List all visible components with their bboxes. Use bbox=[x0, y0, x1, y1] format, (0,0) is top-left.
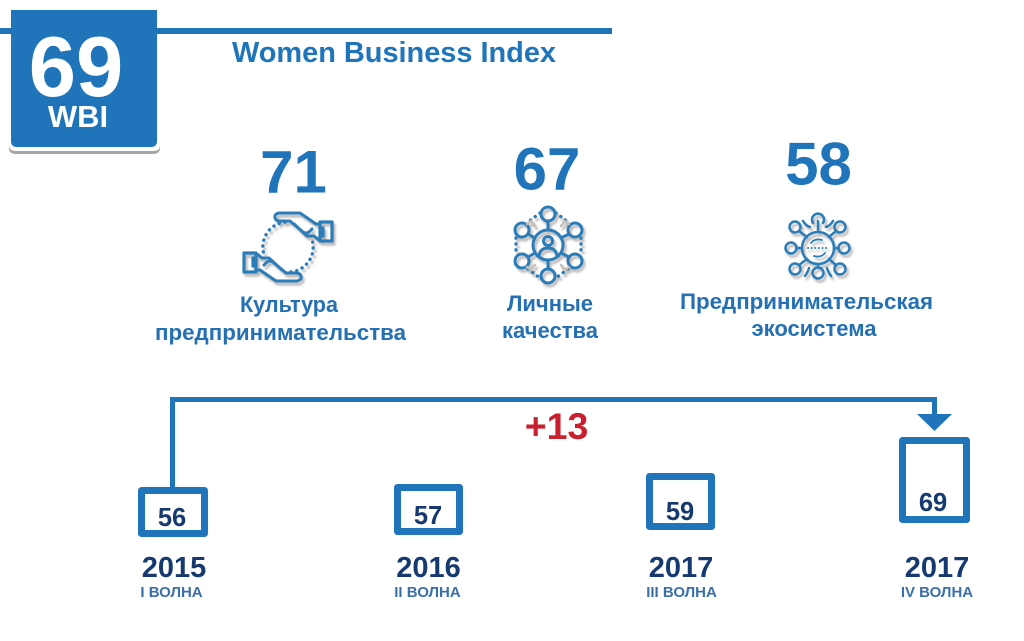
panel: culture of entrepreneurship: предпринимательства bbox=[155, 320, 407, 345]
column: 2017 fourth wave: 69 bbox=[919, 489, 947, 517]
column: 2017 third wave: 2017 bbox=[649, 552, 713, 584]
personal qualities score: 67 bbox=[514, 136, 580, 202]
ecosystem score: 58 bbox=[785, 130, 852, 198]
panel: culture of entrepreneurship bbox=[155, 138, 407, 345]
icon: ecosystem bbox=[786, 214, 850, 278]
culture label: Культура bbox=[240, 292, 339, 317]
WBI score badge: 69 bbox=[29, 20, 123, 115]
ecosystem label: Предпринимательская bbox=[680, 289, 933, 314]
column: 2015: 56 bbox=[158, 504, 186, 532]
column: 2016 bbox=[394, 488, 461, 601]
panel: personal qualities: качества bbox=[502, 318, 599, 343]
WBI score badge bbox=[9, 10, 160, 154]
column: 2016: II ВОЛНА bbox=[394, 584, 461, 601]
column: 2015: I ВОЛНА bbox=[140, 584, 203, 601]
column: 2016: 57 bbox=[414, 502, 442, 530]
growth value: +13 bbox=[525, 405, 588, 447]
column: 2017 fourth wave bbox=[901, 440, 973, 601]
WBI score badge: WBI bbox=[48, 99, 108, 134]
title: Women Business Index bbox=[232, 37, 556, 69]
column: 2015: 2015 bbox=[142, 552, 206, 584]
column: 2017 fourth wave: IV ВОЛНА bbox=[901, 584, 973, 601]
column: 2017 third wave: III ВОЛНА bbox=[646, 584, 717, 601]
column: 2017 third wave: 59 bbox=[666, 498, 694, 526]
column: 2015 bbox=[140, 490, 206, 601]
panel: entrepreneurial ecosystem: экосистема bbox=[752, 316, 877, 341]
header rule bbox=[0, 28, 612, 34]
icon: hands bbox=[244, 213, 332, 281]
column: 2016: 2016 bbox=[396, 552, 461, 584]
arrow: growth from first to fourth wave bbox=[172, 400, 952, 490]
icon: person network bbox=[515, 207, 582, 283]
panel: personal qualities bbox=[502, 136, 599, 343]
column: 2017 fourth wave: 2017 bbox=[905, 552, 969, 584]
panel: entrepreneurial ecosystem bbox=[680, 130, 933, 341]
column: 2017 third wave bbox=[646, 476, 717, 601]
culture score: 71 bbox=[260, 138, 327, 206]
personal qualities label: Личные bbox=[507, 291, 593, 316]
